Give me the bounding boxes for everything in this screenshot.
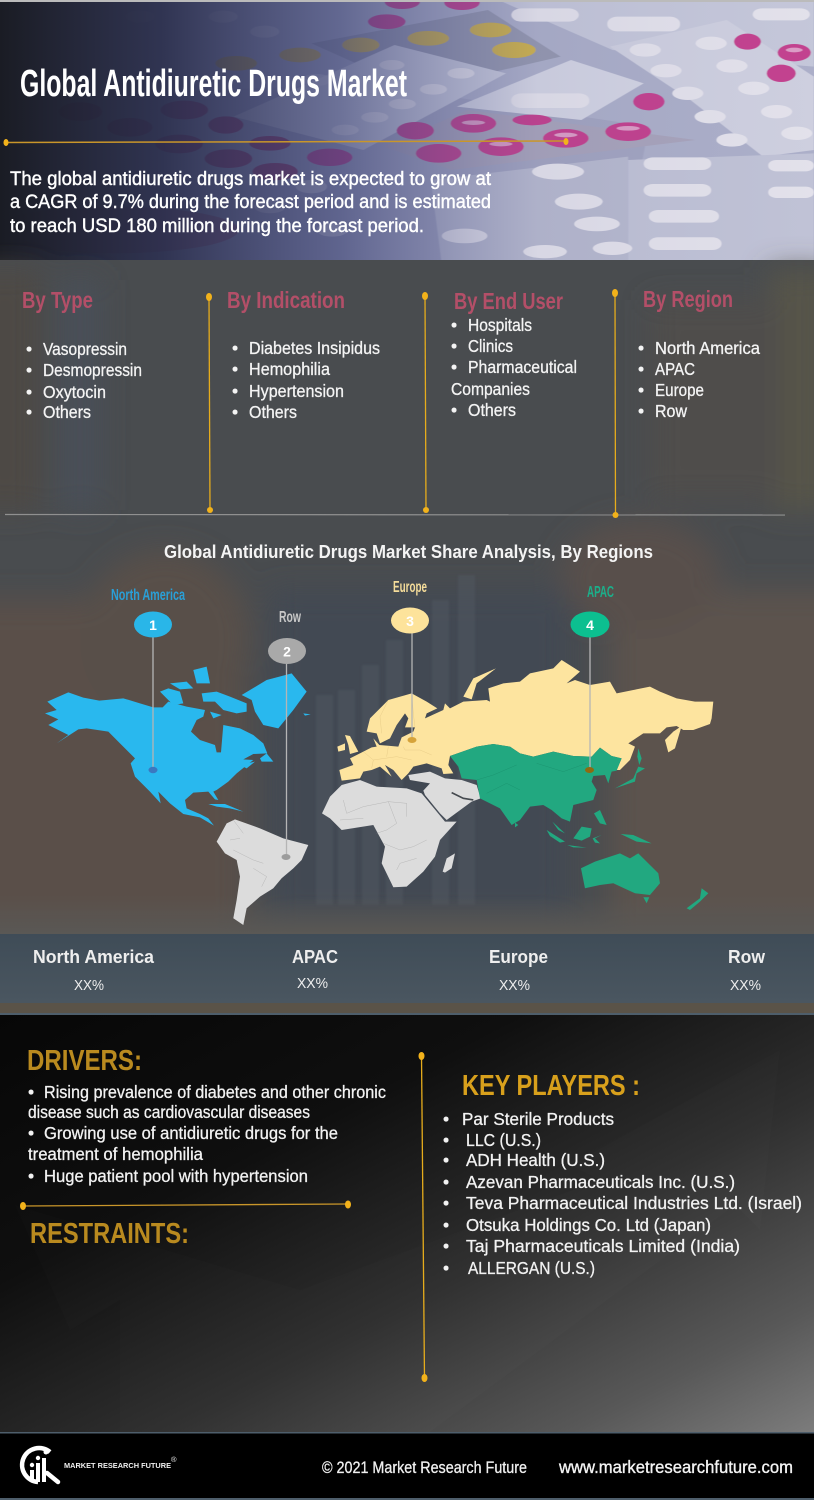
- panel: by type: [22, 287, 142, 422]
- pin 4: apac: 4: [586, 617, 594, 633]
- stat: europe: [489, 947, 548, 994]
- list: key players: ADH Health (U.S.): [466, 1150, 605, 1170]
- list: type items: Others: [43, 402, 91, 422]
- panel: by end user: [451, 288, 577, 420]
- stats band: [0, 934, 814, 1014]
- list: indication items: •: [232, 381, 238, 401]
- title: Global Antidiuretic Drugs Market: [20, 63, 407, 105]
- list: key players: Par Sterile Products: [462, 1109, 614, 1129]
- list: type items: •: [26, 402, 32, 422]
- pin 2: row: Row: [279, 609, 301, 626]
- list: drivers: •: [28, 1166, 34, 1186]
- list: indication items: Diabetes Insipidus: [249, 338, 380, 358]
- list: indication items: [232, 338, 380, 422]
- list: end user items: Companies: [451, 379, 530, 399]
- heading: drivers: DRIVERS:: [27, 1045, 142, 1077]
- list: indication items: •: [232, 402, 238, 422]
- website: www.marketresearchfuture.com: [558, 1457, 793, 1477]
- panel: by region: [638, 286, 760, 421]
- list: end user items: Clinics: [468, 336, 513, 356]
- list: drivers: Growing use of antidiuretic drugs for the: [44, 1123, 338, 1143]
- copyright: © 2021 Market Research Future: [322, 1459, 527, 1477]
- list: region items: North America: [655, 338, 760, 358]
- list: type items: •: [26, 339, 32, 359]
- registered mark: ®: [171, 1455, 177, 1464]
- list: type items: •: [26, 360, 32, 380]
- list: key players: •: [443, 1130, 449, 1150]
- map region: north america: [45, 667, 311, 826]
- heading: key players: KEY PLAYERS :: [462, 1070, 640, 1102]
- list: end user items: Hospitals: [468, 315, 532, 335]
- list: end user items: •: [451, 400, 457, 420]
- map: world regions: [45, 660, 713, 925]
- list: key players: Otsuka Holdings Co. Ltd (Japan): [466, 1215, 711, 1235]
- list: drivers: •: [28, 1082, 34, 1102]
- list: key players: Teva Pharmaceutical Industries Ltd. (Israel): [466, 1193, 802, 1213]
- list: end user items: Pharmaceutical: [468, 357, 577, 377]
- pin 1: north america: North America: [111, 587, 185, 604]
- list: region items: •: [638, 359, 644, 379]
- list: key players: •: [443, 1172, 449, 1192]
- pin 2: row: [268, 609, 306, 860]
- gold divider: vertical: [418, 1052, 428, 1382]
- logo text: MARKET RESEARCH FUTURE: [64, 1461, 171, 1470]
- heading: restraints: RESTRAINTS:: [30, 1218, 189, 1250]
- intro paragraph: [10, 169, 492, 237]
- list: key players: •: [443, 1109, 449, 1129]
- pin 3: europe: [391, 579, 429, 743]
- intro paragraph: to reach USD 180 million during the forcast period.: [10, 216, 424, 237]
- stat: north america: [33, 947, 155, 994]
- list: key players: •: [443, 1193, 449, 1213]
- list: indication items: Hemophilia: [249, 359, 330, 379]
- pin 1: north america: 1: [149, 617, 157, 633]
- stat: europe: Europe: [489, 947, 548, 967]
- stat: north america: XX%: [74, 977, 104, 994]
- list: type items: Desmopressin: [43, 360, 142, 380]
- list: key players: •: [443, 1215, 449, 1235]
- list: key players: •: [443, 1258, 449, 1278]
- stat: row: Row: [728, 947, 766, 967]
- list: key players: •: [443, 1150, 449, 1170]
- lower section background: [0, 1013, 814, 1432]
- map region: africa and middle east: [322, 772, 481, 887]
- list: drivers: Rising prevalence of diabetes and other chronic: [44, 1082, 386, 1102]
- map region: south america: [217, 819, 308, 925]
- list: region items: Europe: [655, 380, 704, 400]
- list: type items: •: [26, 382, 32, 402]
- list: end user items: Others: [468, 400, 516, 420]
- list: indication items: Others: [249, 402, 297, 422]
- list: end user items: •: [451, 315, 457, 335]
- list: drivers: Huge patient pool with hypertension: [44, 1166, 308, 1186]
- panel: key players: [443, 1070, 802, 1278]
- list: indication items: •: [232, 338, 238, 358]
- gold divider: drivers and restraints: [20, 1200, 351, 1210]
- panel: drivers: [27, 1045, 386, 1186]
- list: drivers: •: [28, 1123, 34, 1143]
- footer: [0, 1432, 814, 1500]
- list: drivers: treatment of hemophilia: [28, 1144, 203, 1164]
- list: region items: Row: [655, 401, 687, 421]
- icon: market research future logo: [22, 1448, 58, 1482]
- pin 1: north america: [111, 587, 185, 773]
- list: drivers: [28, 1082, 386, 1186]
- list: key players: [443, 1109, 802, 1278]
- list: indication items: Hypertension: [249, 381, 344, 401]
- header photo: blister packs of pills: [0, 0, 814, 260]
- gold divider with dots: [4, 138, 568, 146]
- stat: row: XX%: [730, 977, 761, 994]
- pin 3: europe: Europe: [393, 579, 427, 596]
- pin 4: apac: APAC: [587, 584, 614, 601]
- column dividers: [5, 289, 785, 518]
- list: end user items: •: [451, 336, 457, 356]
- stat: row: [728, 947, 766, 994]
- list: key players: LLC (U.S.): [466, 1130, 541, 1150]
- pin 4: apac: [570, 584, 614, 773]
- heading: by type: By Type: [22, 287, 93, 313]
- list: end user items: •: [451, 357, 457, 377]
- heading: by end user: By End User: [454, 288, 563, 314]
- list: region items: APAC: [655, 359, 695, 379]
- list: region items: [638, 338, 760, 421]
- chart title: Global Antidiuretic Drugs Market Share Analysis, By Regions: [164, 542, 653, 562]
- heading: by indication: By Indication: [227, 287, 345, 313]
- panel: by indication: [227, 287, 380, 422]
- list: key players: ALLERGAN (U.S.): [468, 1258, 595, 1278]
- list: key players: Taj Pharmaceuticals Limited (India): [466, 1236, 740, 1256]
- intro paragraph: The global antidiuretic drugs market is expected to grow at: [10, 169, 492, 190]
- list: region items: •: [638, 338, 644, 358]
- map region: apac: [450, 744, 708, 910]
- stat: apac: APAC: [292, 947, 338, 967]
- list: indication items: •: [232, 359, 238, 379]
- list: drivers: disease such as cardiovascular diseases: [28, 1102, 310, 1122]
- list: type items: Oxytocin: [43, 382, 106, 402]
- list: key players: •: [443, 1236, 449, 1256]
- list: type items: [26, 339, 142, 422]
- pin 3: europe: 3: [406, 613, 414, 629]
- list: type items: Vasopressin: [43, 339, 127, 359]
- stat: europe: XX%: [499, 977, 530, 994]
- stat: north america: North America: [33, 947, 155, 967]
- stat: apac: XX%: [297, 975, 328, 992]
- map region: europe and russia: [337, 660, 713, 781]
- list: region items: •: [638, 380, 644, 400]
- heading: by region: By Region: [643, 286, 733, 312]
- middle section background: blurred hand and bar chart photo: [0, 260, 814, 1014]
- intro paragraph: a CAGR of 9.7% during the forecast period and is estimated: [10, 192, 491, 213]
- list: key players: Azevan Pharmaceuticals Inc. (U.S.): [466, 1172, 735, 1192]
- stat: apac: [292, 947, 338, 992]
- list: region items: •: [638, 401, 644, 421]
- pin 2: row: 2: [283, 644, 291, 660]
- list: end user items: [451, 315, 577, 420]
